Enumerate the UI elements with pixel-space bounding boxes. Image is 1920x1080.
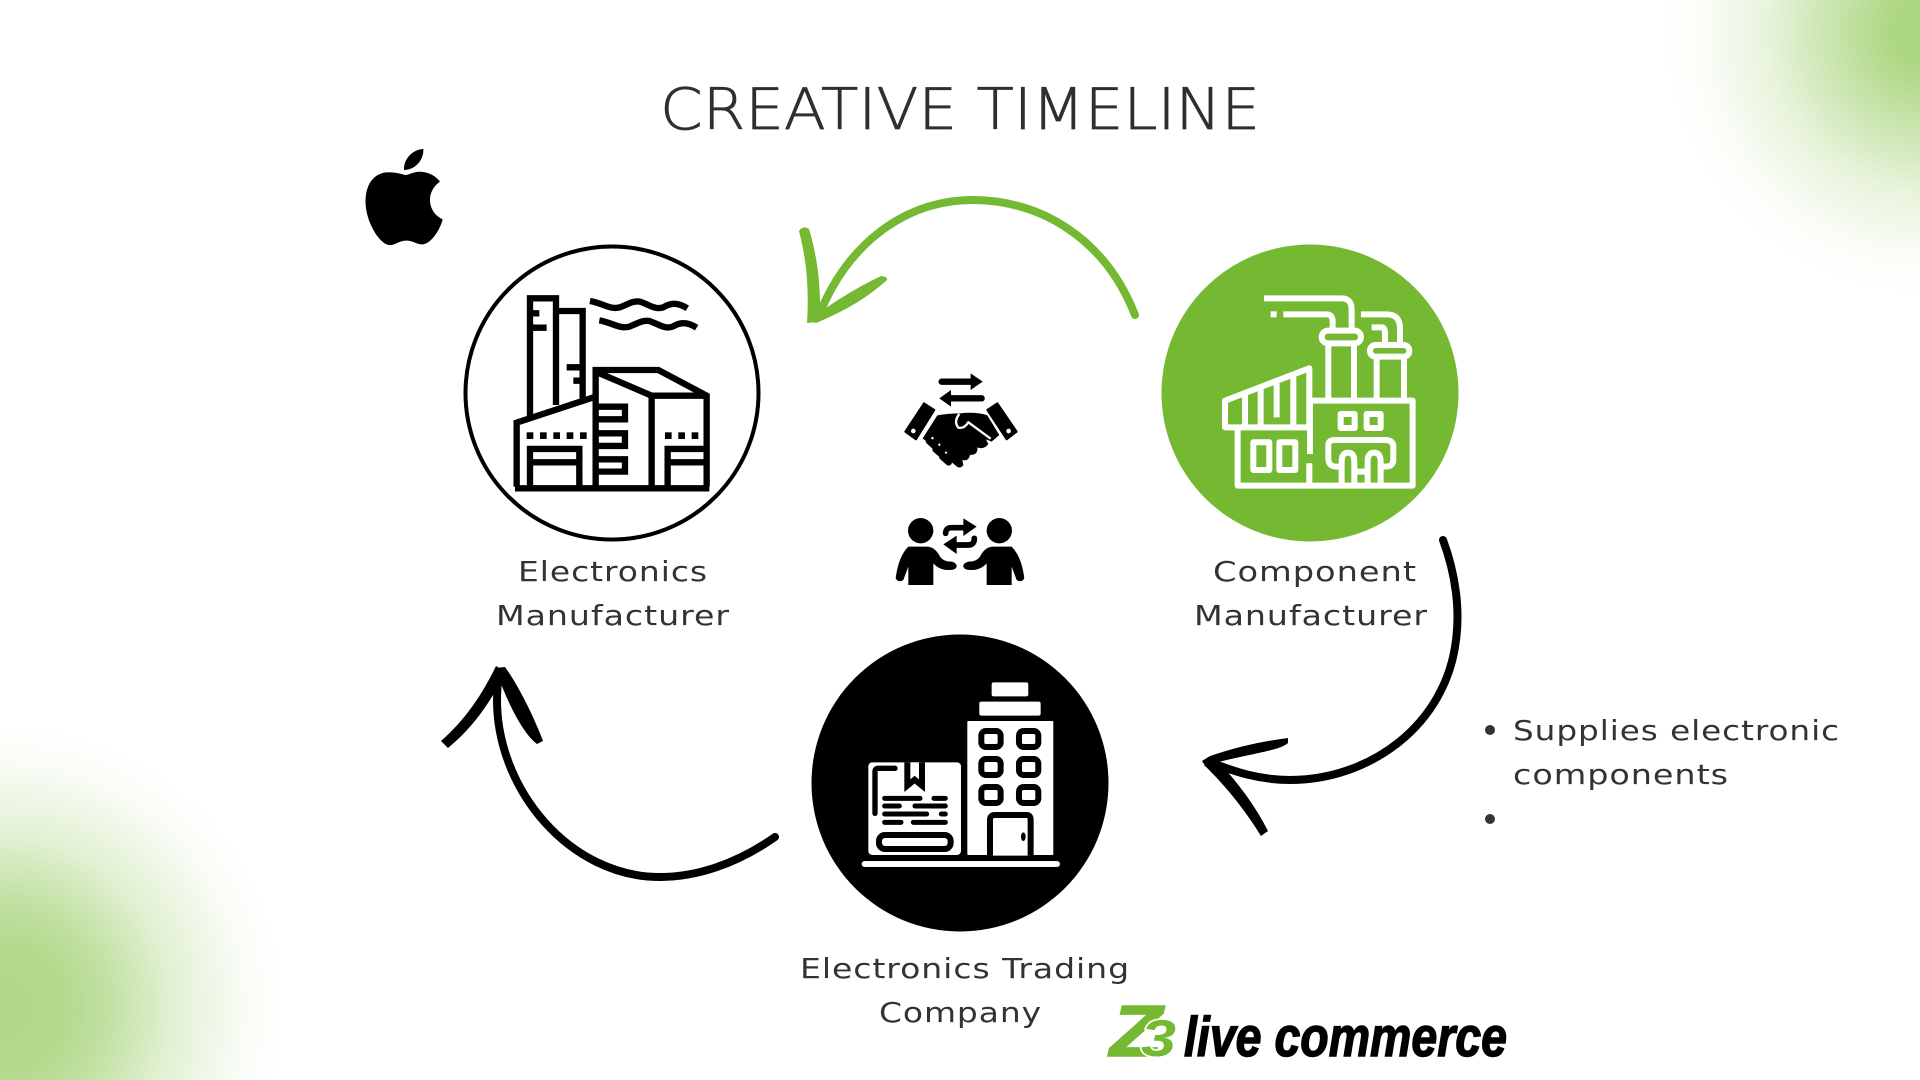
panel: electronics trading company node [800, 634, 1130, 1029]
icon: factory with smoke [515, 298, 709, 488]
label: component manufacturer: Manufacturer [1194, 599, 1428, 632]
green circle [1162, 244, 1458, 542]
logo: Z3 live commerce: Z [1108, 992, 1166, 1072]
icon: office building and package [862, 682, 1060, 867]
label: electronics trading company: Electronics Trading [800, 952, 1130, 985]
icon: factory with pipes [1225, 298, 1413, 486]
decorative green glow: bottom left [0, 690, 310, 1080]
label: component manufacturer [1194, 555, 1428, 632]
label: electronics manufacturer: Manufacturer [496, 599, 730, 632]
logo: Z3 live commerce [1108, 992, 1507, 1072]
logo: Z3 live commerce: live commerce [1184, 1005, 1507, 1068]
label: electronics manufacturer [496, 555, 730, 632]
arrow: black, trading company to electronics manufacturer [441, 666, 775, 877]
bullet list: component manufacturer notes [1485, 714, 1840, 824]
panel: electronics manufacturer node [466, 246, 758, 632]
decorative green glow: top right [1620, 0, 1920, 320]
label: component manufacturer: Component [1213, 555, 1417, 588]
label: electronics trading company: Company [879, 996, 1042, 1029]
logo: Z3 live commerce: 3 [1141, 1010, 1176, 1068]
arrow: black, component to trading company [1202, 540, 1457, 836]
icon: apple logo [366, 149, 443, 245]
black circle [812, 634, 1108, 932]
label: electronics manufacturer: Electronics [518, 555, 708, 588]
label: electronics trading company [800, 952, 1130, 1029]
arrow: green, component to electronics manufacturer [799, 200, 1135, 323]
bullet list: component manufacturer notes: components [1513, 758, 1729, 791]
icon: two people exchanging [896, 518, 1024, 585]
icon: handshake with exchange arrows [905, 373, 1017, 467]
circle outline [466, 246, 758, 540]
bullet list: component manufacturer notes: Supplies electronic [1513, 714, 1840, 747]
title: CREATIVE TIMELINE [660, 77, 1260, 143]
panel: component manufacturer node [1162, 244, 1458, 632]
